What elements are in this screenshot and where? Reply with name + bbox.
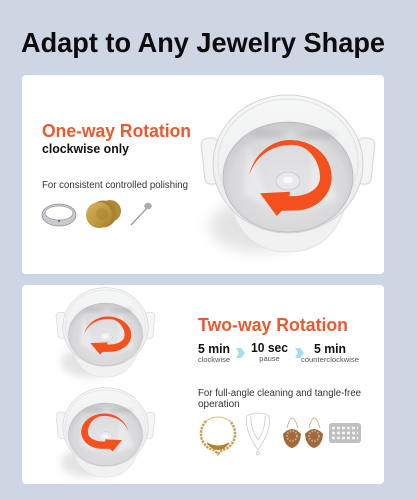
icon: gold earrings	[283, 418, 323, 448]
panel: two-way rotation	[22, 285, 384, 484]
step: 10 sec pause	[251, 341, 288, 363]
step: 5 min clockwise: clockwise	[198, 355, 230, 364]
icon: gold necklace	[201, 417, 235, 454]
image: bowl counterclockwise	[56, 388, 155, 477]
arrow: clockwise small	[84, 316, 131, 354]
step: 10 sec pause: pause	[259, 354, 280, 363]
image: bowl clockwise	[56, 288, 155, 377]
icon: earring pin	[131, 203, 152, 225]
title: Adapt to Any Jewelry Shape	[21, 27, 385, 58]
heading: one-way rotation: One-way Rotation	[42, 121, 191, 141]
subheading: clockwise only: clockwise only	[42, 142, 129, 156]
arrow: counterclockwise small	[81, 414, 128, 452]
text: full-angle cleaning: For full-angle cleaning and tangle-free	[198, 388, 361, 399]
icon: gold coins	[86, 200, 121, 228]
text: full-angle cleaning: operation	[198, 399, 240, 410]
step: 10 sec pause: 10 sec	[251, 341, 288, 355]
arrow: chevron one	[236, 348, 245, 358]
arrow: clockwise	[249, 140, 332, 216]
icon: silver necklace	[246, 413, 270, 454]
step: 5 min counterclockwise: counterclockwise	[301, 355, 359, 364]
icon: silver bracelet	[329, 423, 361, 443]
step: 5 min counterclockwise: 5 min	[314, 342, 346, 356]
text: full-angle cleaning	[198, 388, 361, 410]
step: 5 min clockwise: 5 min	[198, 342, 230, 356]
image: bowl with clockwise arrow	[201, 95, 375, 252]
step: 5 min counterclockwise	[301, 342, 359, 364]
heading: two-way rotation: Two-way Rotation	[198, 315, 348, 335]
arrow: chevron two	[295, 348, 304, 358]
icon: silver ring	[42, 204, 76, 226]
text: consistent polishing: For consistent controlled polishing	[42, 180, 188, 191]
panel: one-way rotation	[22, 75, 384, 274]
step: 5 min clockwise	[198, 342, 230, 364]
